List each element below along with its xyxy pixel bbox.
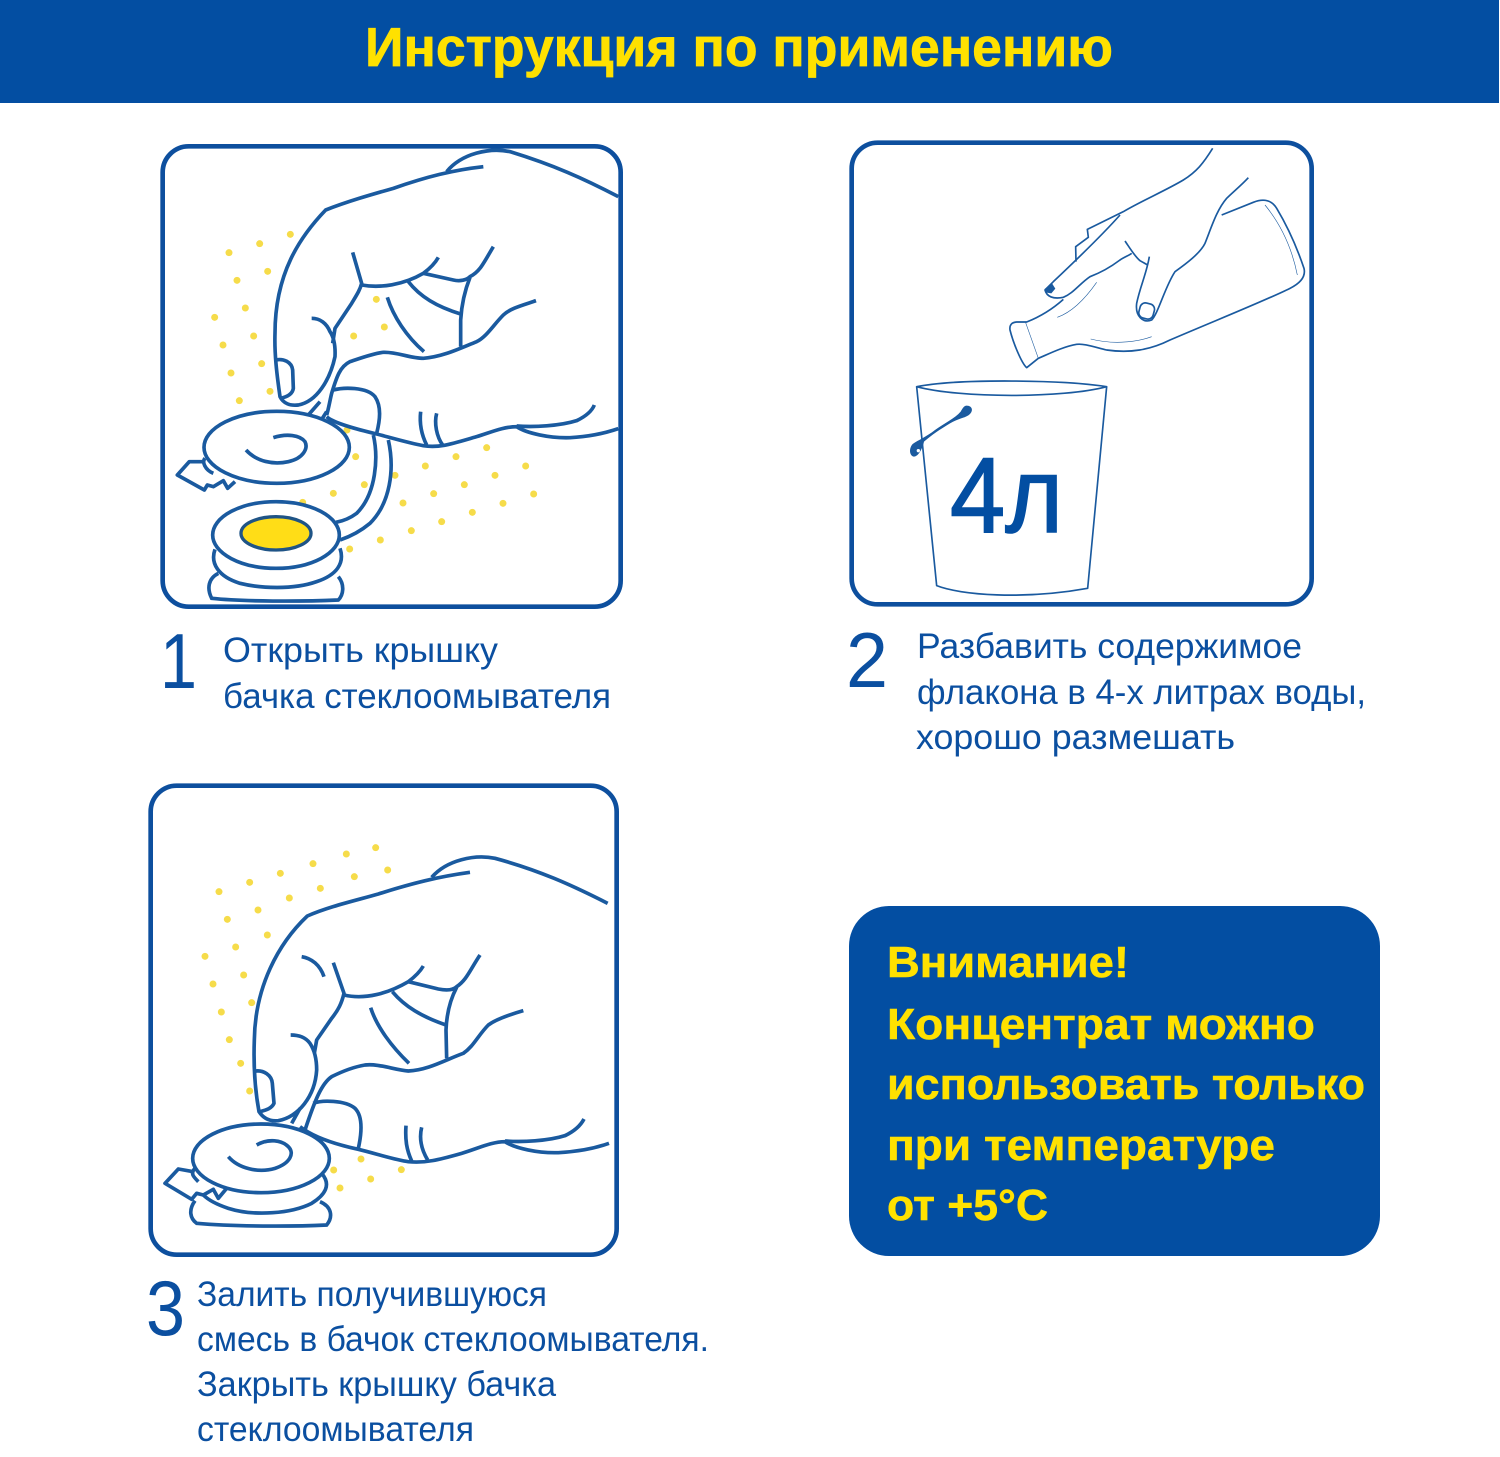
- icon: closed washer tank cap: [165, 1124, 331, 1226]
- callout: warning: при температуре: [887, 1121, 1275, 1170]
- step 3 number: 3: [146, 1264, 185, 1352]
- callout: warning: [849, 906, 1380, 1256]
- panel: step 2 illustration: [852, 143, 1312, 604]
- panel: step 3 illustration: [151, 786, 617, 1255]
- callout: warning: Внимание!: [887, 938, 1129, 987]
- icon: washer tank with open cap: [177, 411, 391, 601]
- callout: warning: использовать только: [887, 1060, 1365, 1109]
- step 1 text: Открыть крышку: [223, 631, 499, 670]
- step 2 text: [916, 627, 1366, 757]
- icon: hand: [254, 857, 609, 1162]
- yellow dots: [211, 231, 537, 552]
- icon: bucket: [910, 381, 1107, 595]
- step 1 text: бачка стеклоомывателя: [223, 677, 611, 716]
- step 2 text: хорошо размешать: [916, 718, 1235, 757]
- step 2 text: Разбавить содержимое: [917, 627, 1302, 666]
- step 2 number: 2: [846, 616, 888, 704]
- yellow dots: [201, 844, 405, 1191]
- step 3 text: стеклоомывателя: [197, 1410, 474, 1449]
- callout: warning: от +5°C: [887, 1181, 1048, 1230]
- step 3 text: смесь в бачок стеклоомывателя.: [197, 1320, 709, 1359]
- icon: bottle: [1010, 200, 1304, 368]
- icon: hand holding bottle: [1045, 148, 1248, 321]
- bucket volume label: 4л: [950, 435, 1063, 555]
- panel: step 1 illustration: [163, 146, 621, 607]
- step 1 text: [223, 631, 611, 716]
- step 1 number: 1: [160, 617, 197, 705]
- step 3 text: Закрыть крышку бачка: [197, 1365, 557, 1404]
- step 3 text: Залить получившуюся: [197, 1275, 547, 1314]
- step 3 text: [197, 1275, 709, 1449]
- icon: hand: [275, 150, 618, 446]
- callout: warning: Концентрат можно: [887, 1000, 1315, 1049]
- title: Инструкция по применению: [365, 16, 1113, 78]
- step 2 text: флакона в 4-х литрах воды,: [917, 673, 1366, 712]
- header bar: [0, 0, 1499, 103]
